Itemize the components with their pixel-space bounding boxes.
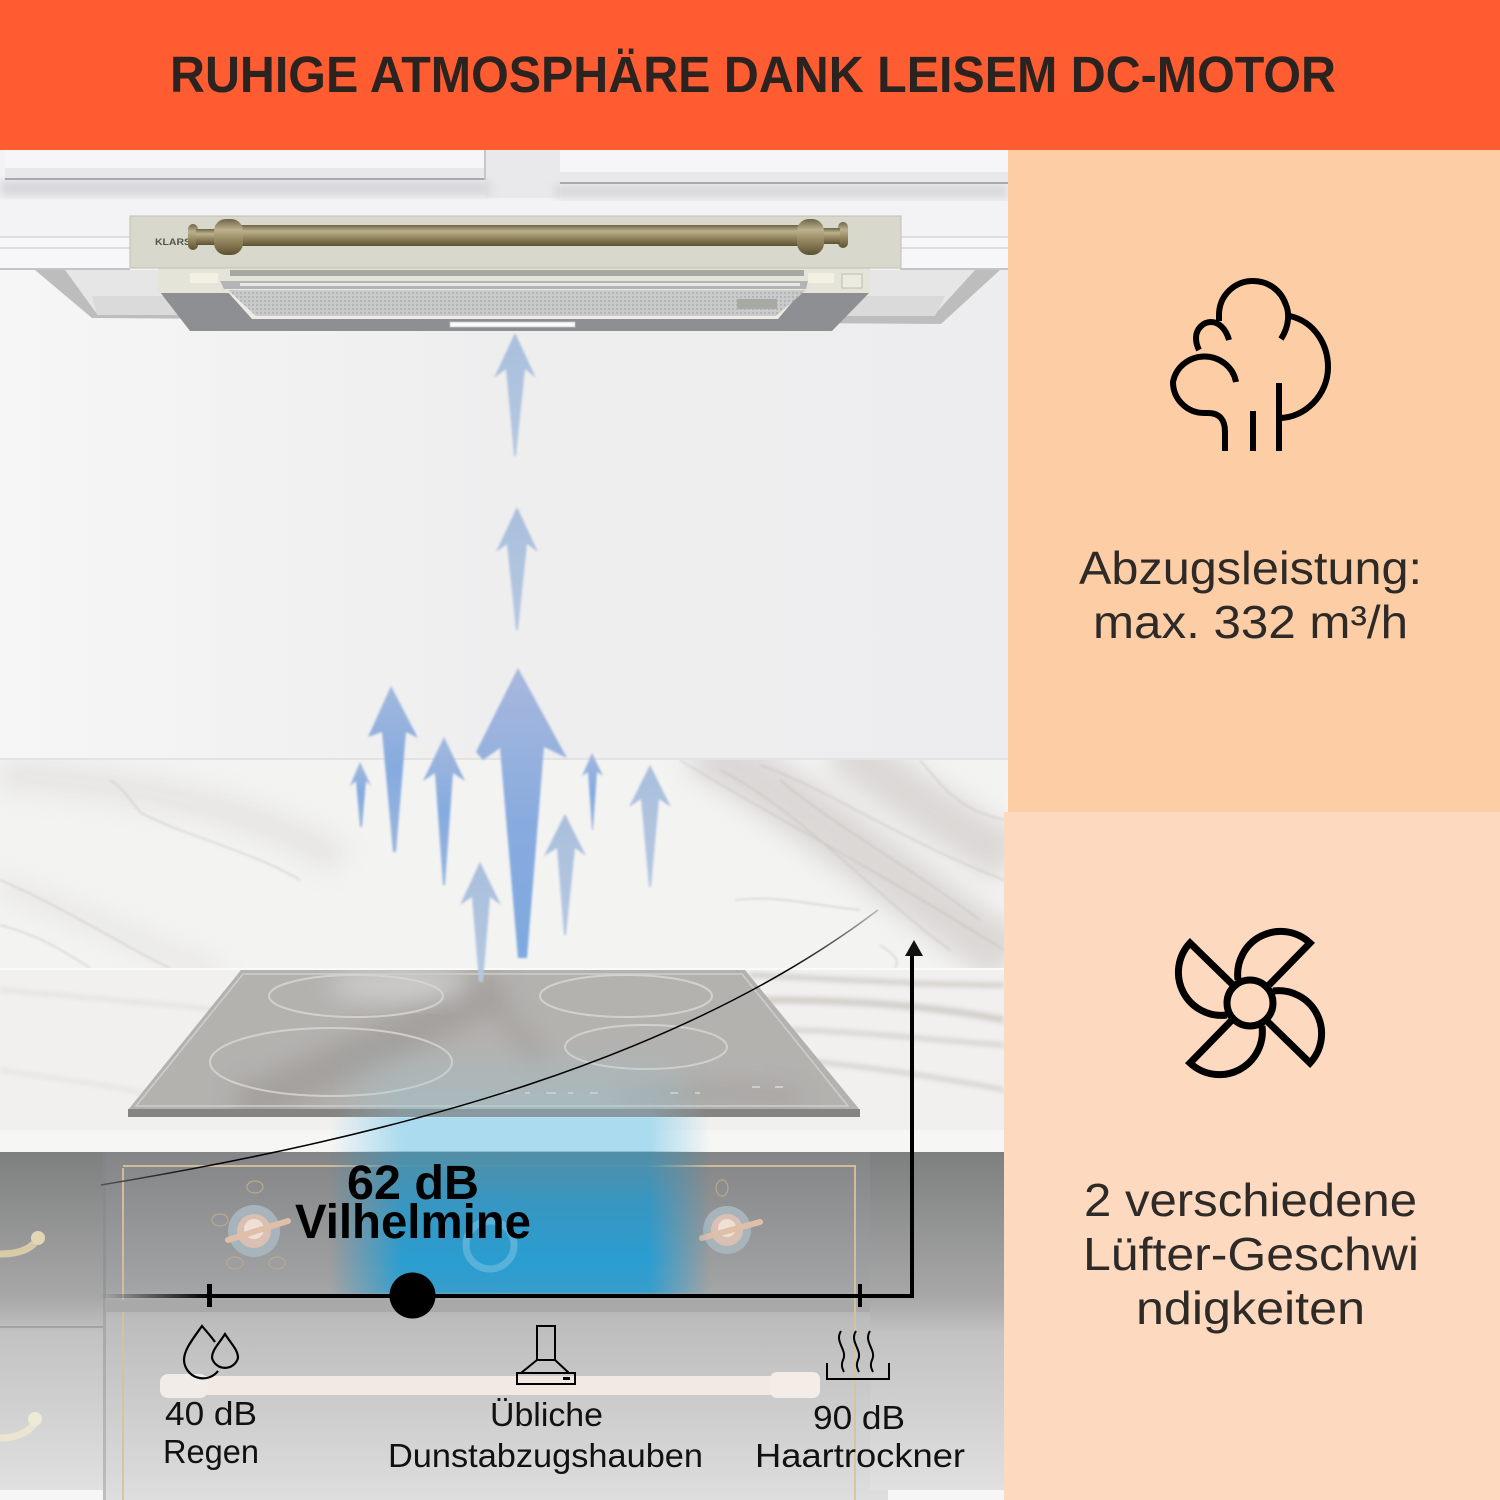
hood housing [35, 270, 1000, 324]
marker dot [390, 1272, 436, 1318]
label: typical hoods: Übliche [490, 1396, 603, 1433]
icon: cooker hood [517, 1326, 575, 1384]
text: fan speeds: ndigkeiten [1136, 1282, 1365, 1334]
panel: fan speeds [1004, 812, 1500, 1500]
text: extraction power: Abzugsleistung: [1079, 542, 1422, 594]
blue noise highlight [334, 1062, 708, 1294]
grease filter [218, 281, 810, 319]
brass handle [188, 219, 848, 255]
arrow: tall left [368, 686, 418, 852]
panel: extraction power [1008, 150, 1500, 812]
extractor hood: KLARS [155, 237, 191, 247]
arrow: lower right [544, 814, 586, 935]
arrow: central large [476, 668, 567, 958]
label: 90 dB hair dryer: 90 dB [813, 1399, 905, 1436]
label: 62 dB Vilhelmine: Vilhelmine [295, 1196, 531, 1249]
front panel [130, 216, 901, 268]
left cabinet handles [0, 1231, 45, 1438]
induction cooktop [128, 967, 860, 1117]
icon: fan [1178, 931, 1322, 1075]
touch controls [500, 1086, 783, 1094]
noise curve [101, 910, 878, 1185]
icon: steam cloud [1173, 281, 1328, 451]
label: 90 dB hair dryer [755, 1331, 965, 1474]
countertop [0, 968, 1004, 1152]
label: 90 dB hair dryer: Haartrockner [755, 1437, 965, 1474]
label: 40 dB rain [163, 1326, 266, 1470]
text: fan speeds: Lüfter-Geschwi [1083, 1228, 1419, 1280]
extractor hood [35, 216, 1000, 331]
cabinet doors [0, 150, 1008, 270]
axis [100, 940, 923, 1307]
arrow: lower left [460, 862, 501, 982]
arrow: upper middle [496, 507, 538, 630]
oven knobs [212, 1180, 760, 1269]
label: typical hoods [388, 1326, 703, 1474]
oven handle [160, 1372, 820, 1398]
label: 62 dB Vilhelmine: 62 dB [347, 1157, 479, 1210]
marble splashback [0, 745, 1010, 975]
title bar [0, 0, 1500, 150]
arrow: small right [582, 753, 603, 830]
arrow: top [494, 333, 536, 456]
slide-out body [160, 292, 870, 331]
icon: water drops [184, 1326, 238, 1378]
text: extraction power: max. 332 m³/h [1093, 596, 1408, 648]
arrow: small far left [350, 762, 371, 827]
icon: hot air [827, 1331, 889, 1379]
arrow: mid left [423, 737, 465, 885]
title: RUHIGE ATMOSPHÄRE DANK LEISEM DC-MOTOR [170, 46, 1336, 103]
label: 40 dB rain: Regen [163, 1433, 259, 1470]
airflow arrows [350, 333, 671, 982]
arrow: far right [629, 765, 671, 887]
text: fan speeds: 2 verschiedene [1084, 1174, 1417, 1226]
label: 40 dB rain: 40 dB [165, 1395, 257, 1432]
oven front [0, 1152, 1004, 1500]
kitchen photo background [0, 150, 1010, 1500]
label: typical hoods: Dunstabzugshauben [388, 1437, 703, 1474]
noise level chart [100, 910, 965, 1474]
label: 62 dB Vilhelmine [295, 1157, 531, 1249]
